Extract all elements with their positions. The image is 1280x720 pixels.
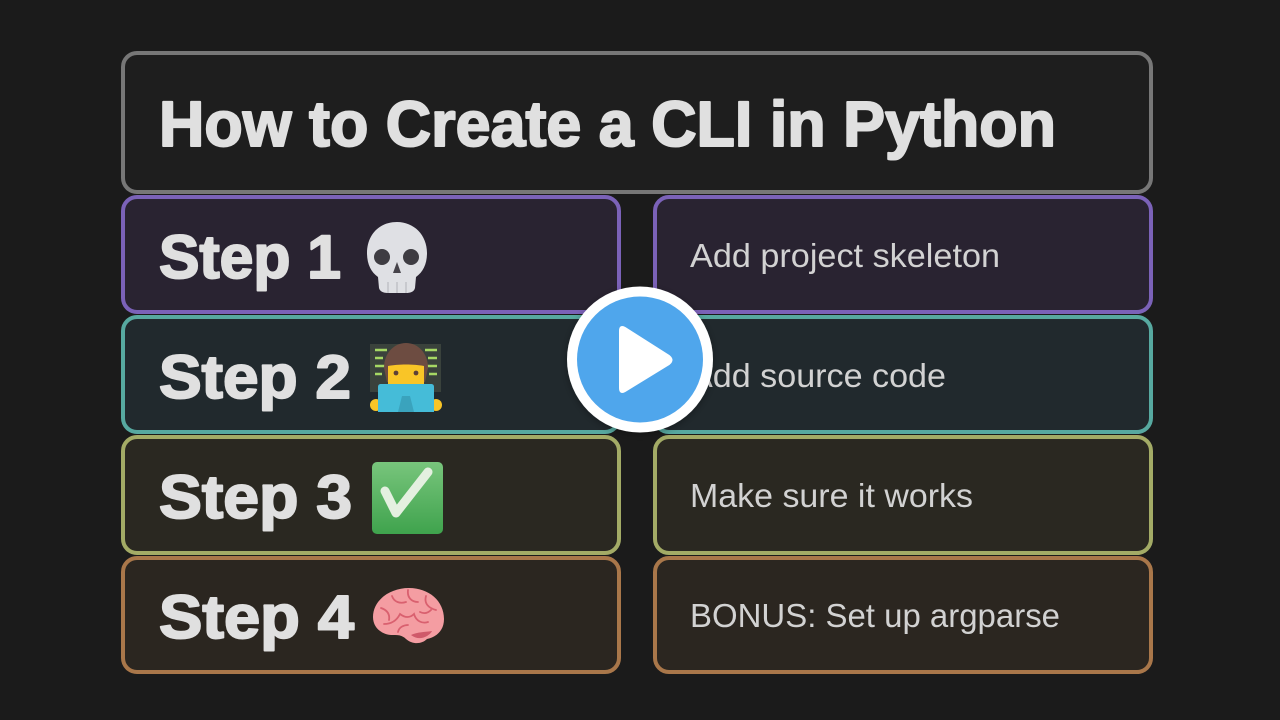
- text: step 2 description: Add source code: [690, 357, 946, 394]
- heading: step 2: Step 2: [159, 343, 351, 411]
- heading: title text: How to Create a CLI in Python: [159, 88, 1056, 160]
- text: step 4 description: BONUS: Set up argparse: [690, 597, 1060, 634]
- panel: step 4 description: [655, 558, 1151, 672]
- panel: step 2 label: [123, 317, 619, 432]
- heading: step 3: Step 3: [159, 463, 352, 531]
- heading: step 4: Step 4: [159, 583, 354, 651]
- panel: step 3 label: [123, 437, 619, 553]
- icon: play button: [567, 286, 713, 432]
- icon: technologist: [370, 343, 442, 412]
- panel: step 2 description: [655, 317, 1151, 432]
- panel: step 3 description: [655, 437, 1151, 553]
- panel: title: [123, 53, 1151, 192]
- heading: step 1: Step 1: [159, 223, 341, 291]
- icon: brain: [373, 588, 444, 643]
- panel: step 1 description: [655, 197, 1151, 312]
- icon: check mark: [372, 462, 443, 534]
- text: step 1 description: Add project skeleton: [690, 237, 1000, 274]
- icon: skull: [367, 222, 427, 293]
- panel: step 4 label: [123, 558, 619, 672]
- text: step 3 description: Make sure it works: [690, 477, 973, 514]
- panel: step 1 label: [123, 197, 619, 312]
